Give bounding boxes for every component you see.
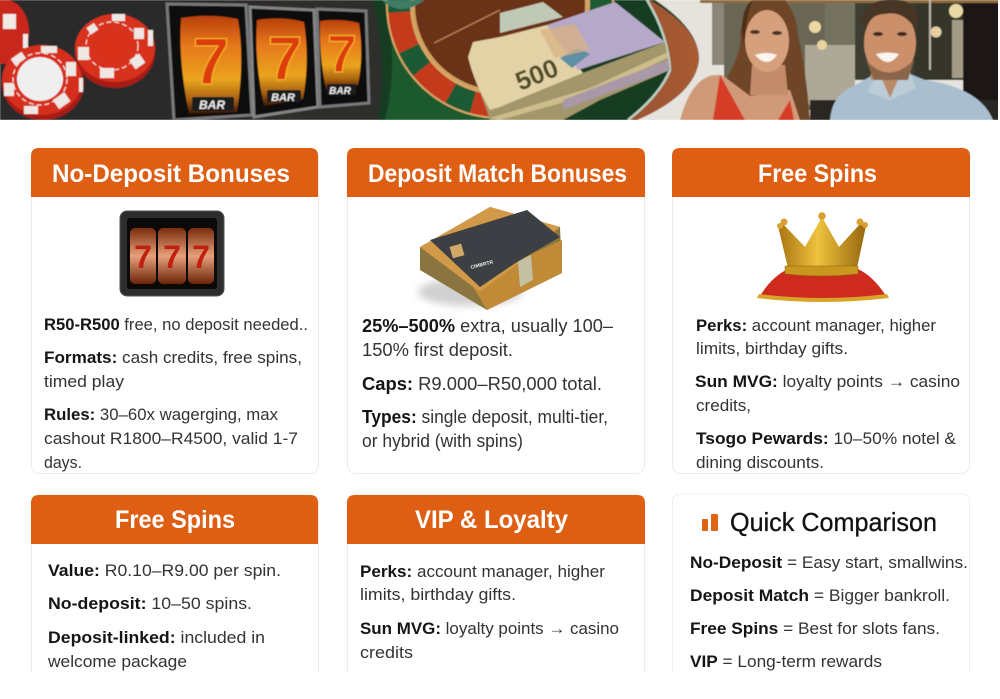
text: comparison list: VIP = Long-term rewards <box>690 652 882 671</box>
icon: stack of banknotes: 500 <box>511 52 562 97</box>
icon: 777 slot machine: 7 <box>192 239 210 275</box>
text: comparison list: No-Deposit = Easy start, smallwins. <box>690 553 968 572</box>
icon: slot machine reels: 7 <box>327 25 357 84</box>
text: VIP details: Sun MVG: loyalty points → casino <box>360 619 619 638</box>
text: free spins details: welcome package <box>47 652 187 671</box>
icon: slot machine reels: 7 <box>193 24 229 98</box>
heading: No-Deposit Bonuses <box>31 148 318 197</box>
text: free spins details: Deposit-linked: included in <box>48 628 265 647</box>
icon: 777 slot machine: 7 <box>134 239 152 275</box>
text: perks details: dining discounts. <box>696 453 824 472</box>
icon: 777 slot machine <box>120 211 224 296</box>
icon: slot machine reels: BAR <box>199 98 225 112</box>
heading: Free Spins <box>31 495 318 544</box>
text: No-Deposit details: timed play <box>44 373 125 391</box>
text: comparison list <box>690 553 968 671</box>
photo: smiling woman <box>680 0 810 120</box>
text: free spins details <box>47 561 281 671</box>
heading: Deposit Match Bonuses: Deposit Match Bonuses <box>368 160 627 188</box>
heading: Free Spins: Free Spins <box>115 506 235 534</box>
text: VIP details: limits, birthday gifts. <box>360 585 516 604</box>
panel: Free Spins (values) <box>31 495 318 672</box>
heading: Free Spins <box>672 148 970 197</box>
panel: Deposit Match Bonuses <box>347 148 645 474</box>
text: VIP details: credits <box>360 643 413 662</box>
text: No-Deposit details: Formats: cash credits, free spins, <box>44 349 302 367</box>
text: perks details <box>695 316 960 472</box>
text: VIP details <box>360 562 619 662</box>
icon: bank card on cash stack: CIMBRTR <box>470 259 494 271</box>
text: perks details: credits, <box>696 396 751 415</box>
icon: stack of banknotes <box>468 2 670 120</box>
text: No-Deposit details <box>44 316 308 472</box>
text: Deposit Match details: or hybrid (with spins) <box>362 431 523 451</box>
icon: slot machine reels: BAR <box>271 92 295 104</box>
heading: Deposit Match Bonuses <box>347 148 645 197</box>
panel: No-Deposit Bonuses <box>31 148 318 474</box>
heading: Free Spins: Free Spins <box>758 160 877 188</box>
heading: No-Deposit Bonuses: No-Deposit Bonuses <box>52 160 290 188</box>
text: Deposit Match details: Caps: R9.000–R50,000 total. <box>362 374 602 394</box>
text: No-Deposit details: Rules: 30–60x wagerging, max <box>44 406 279 424</box>
text: No-Deposit details: R50-R500 free, no deposit needed.. <box>44 316 308 334</box>
text: VIP details: Perks: account manager, higher <box>360 562 605 581</box>
text: perks details: Perks: account manager, higher <box>696 316 936 335</box>
text: Deposit Match details <box>362 316 613 451</box>
photo: smiling man <box>830 0 993 120</box>
text: No-Deposit details: days. <box>44 454 82 472</box>
icon: bank card on cash stack <box>418 207 562 310</box>
heading: VIP & Loyalty <box>347 495 645 544</box>
text: Deposit Match details: Types: single deposit, multi-tier, <box>362 407 608 427</box>
icon: bar chart <box>702 514 718 531</box>
panel: Quick Comparison <box>672 494 970 672</box>
icon: casino chips <box>0 0 155 120</box>
panel: Free Spins (crown) <box>672 148 970 474</box>
text: free spins details: No-deposit: 10–50 spins. <box>48 594 252 613</box>
text: comparison list: Free Spins = Best for slots fans. <box>690 619 940 638</box>
text: Deposit Match details: 150% first deposit. <box>362 340 513 360</box>
text: perks details: limits, birthday gifts. <box>696 339 848 358</box>
icon: slot machine reels: BAR <box>329 86 352 97</box>
icon: gold crown on red cushion <box>757 212 889 302</box>
text: free spins details: Value: R0.10–R9.00 per spin. <box>48 561 281 580</box>
text: perks details: Sun MVG: loyalty points → casino <box>695 372 960 391</box>
photo background: restaurant <box>640 0 1000 120</box>
icon: slot machine reels <box>167 4 369 120</box>
text: perks details: Tsogo Pewards: 10–50% notel & <box>696 429 957 448</box>
panel: VIP & Loyalty <box>347 495 645 672</box>
heading: VIP & Loyalty: VIP & Loyalty <box>415 506 568 534</box>
hero banner <box>0 0 1000 120</box>
text: comparison list: Deposit Match = Bigger bankroll. <box>690 586 950 605</box>
heading: Quick Comparison: Quick Comparison <box>730 507 937 537</box>
text: No-Deposit details: cashout R1800–R4500, valid 1-7 <box>44 430 298 448</box>
text: Deposit Match details: 25%–500% extra, usually 100– <box>362 316 613 336</box>
icon: 777 slot machine: 7 <box>163 239 181 275</box>
icon: roulette table and wheel <box>372 0 699 120</box>
icon: slot machine reels: 7 <box>268 25 302 94</box>
